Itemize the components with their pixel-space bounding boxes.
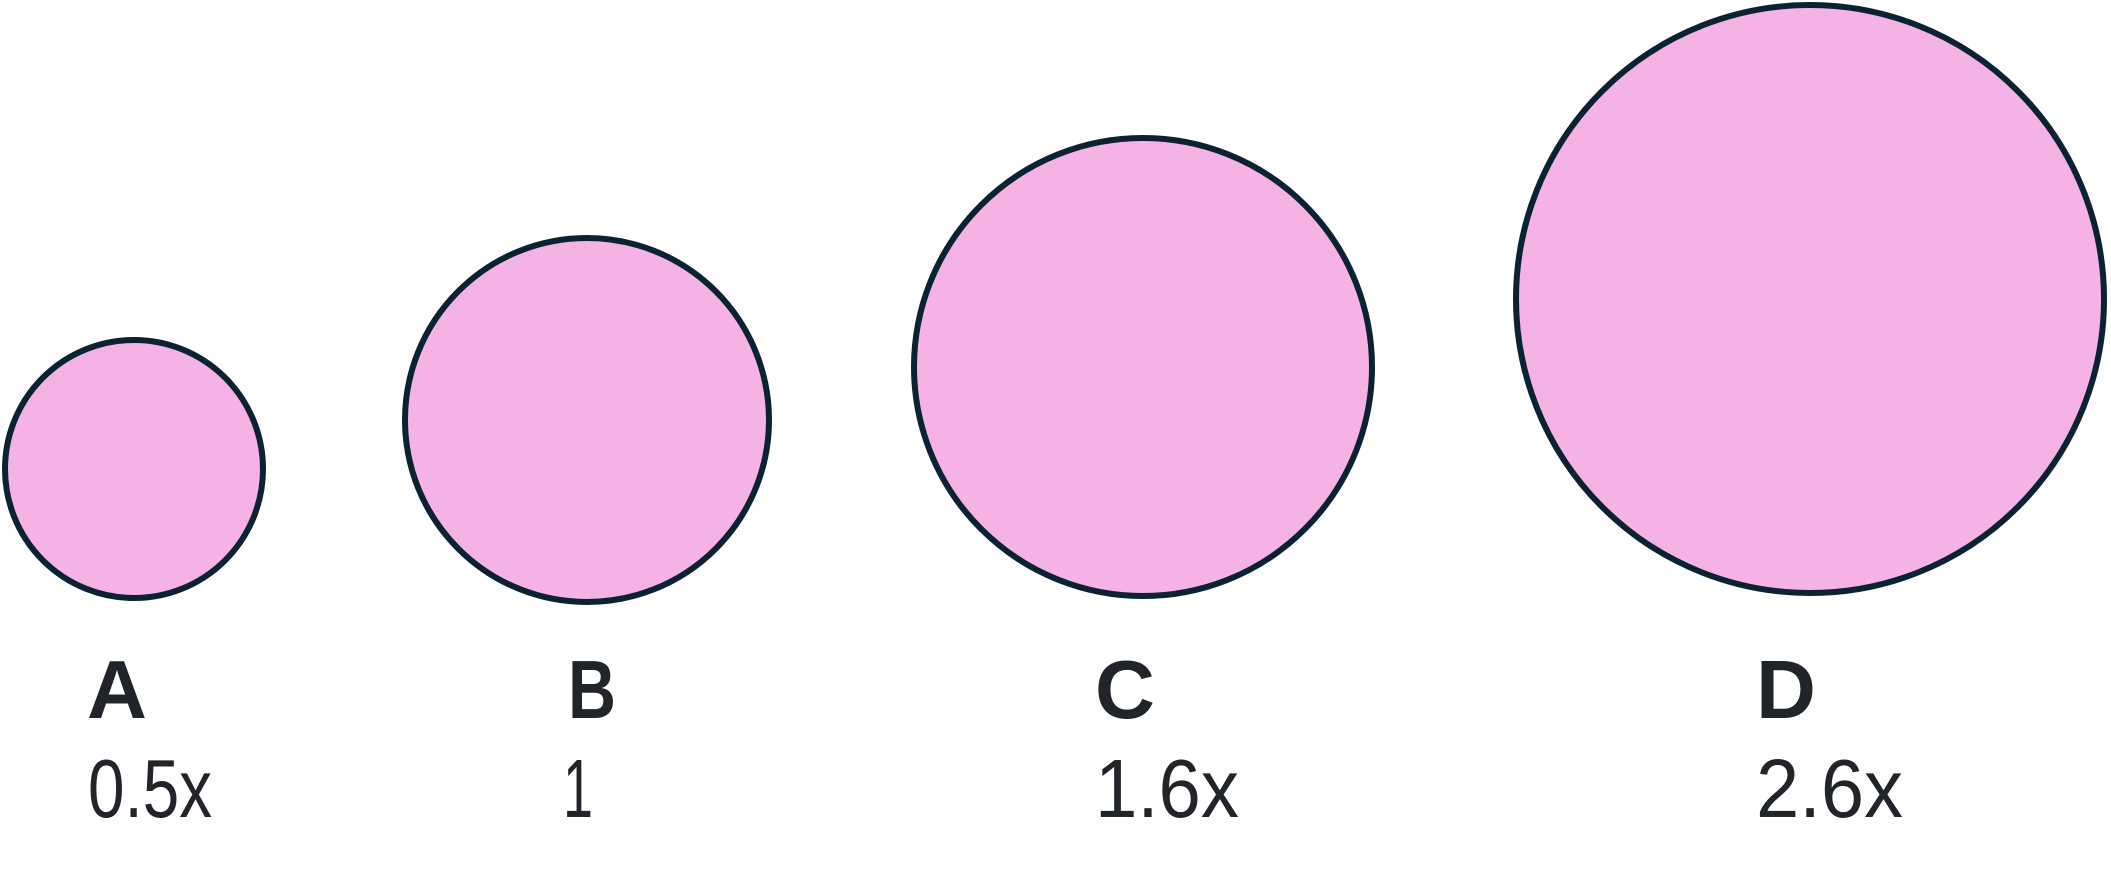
label B: [563, 643, 616, 835]
label C: [1095, 643, 1239, 835]
circle D: [1516, 5, 2104, 593]
label A: [87, 643, 212, 835]
label D: 2.6x: [1756, 742, 1903, 835]
circle A: [5, 340, 263, 598]
label C: 1.6x: [1095, 742, 1239, 835]
label A: A: [87, 643, 147, 736]
circle C: [914, 138, 1372, 596]
circle B: [405, 238, 769, 602]
label D: D: [1756, 643, 1816, 736]
label B: B: [568, 643, 616, 736]
label B: 1: [563, 742, 593, 835]
label D: [1756, 643, 1903, 835]
label A: 0.5x: [88, 742, 212, 835]
label C: C: [1095, 643, 1155, 736]
